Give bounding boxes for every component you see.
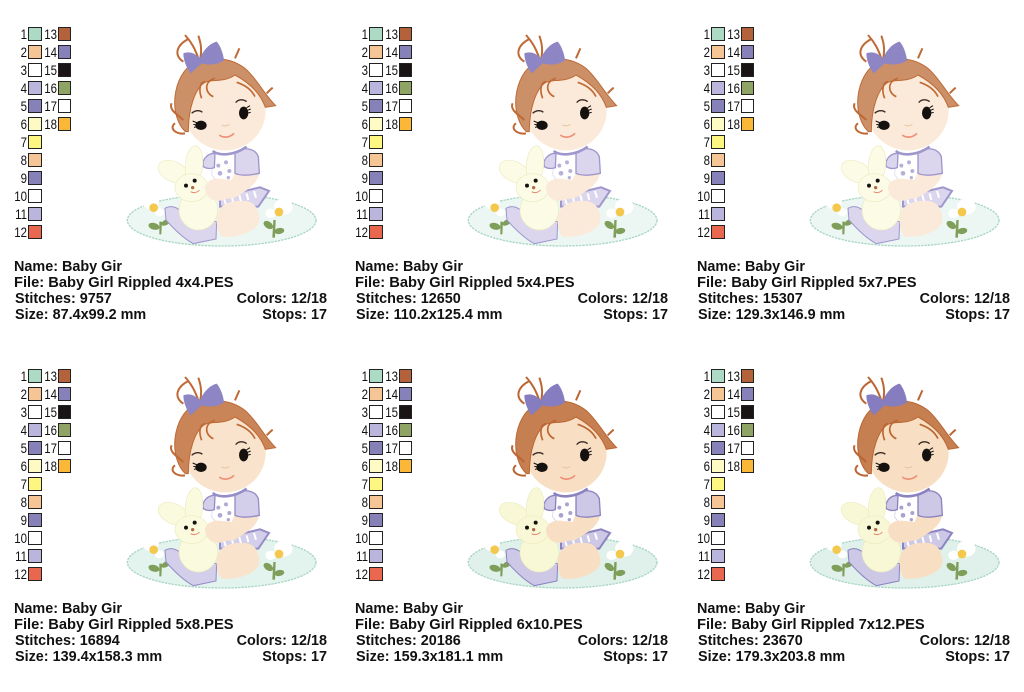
design details	[355, 259, 668, 323]
color legend: 11	[356, 206, 368, 222]
color legend: 1	[21, 368, 27, 384]
color legend: 11	[698, 548, 710, 564]
panel: design 5x4	[355, 26, 668, 323]
color legend: 16	[44, 80, 57, 96]
color legend: 17	[727, 440, 740, 456]
color legend: 3	[21, 62, 27, 78]
illustration: baby girl with bunny	[126, 376, 317, 589]
color legend: 10	[14, 188, 27, 204]
color legend: 9	[362, 512, 368, 528]
color legend: 6	[362, 116, 368, 132]
design details: Name: Baby Gir	[355, 259, 463, 275]
color legend	[14, 368, 71, 582]
design details: Stops: 17	[945, 649, 1010, 665]
design details: File: Baby Girl Rippled 4x4.PES	[14, 275, 234, 291]
design details	[697, 259, 1010, 323]
color legend: 16	[727, 80, 740, 96]
color legend	[697, 26, 754, 240]
design details: Name: Baby Gir	[355, 601, 463, 617]
color legend: 15	[44, 62, 57, 78]
color legend: 16	[385, 422, 398, 438]
design details: Stitches: 23670	[698, 633, 803, 649]
color legend: 4	[21, 422, 27, 438]
design details: Size: 159.3x181.1 mm	[356, 649, 503, 665]
color legend: 7	[362, 134, 368, 150]
color legend: 8	[362, 494, 368, 510]
color legend: 13	[44, 26, 57, 42]
color legend: 2	[704, 386, 710, 402]
color legend: 15	[385, 62, 398, 78]
panel: design 5x7	[697, 26, 1010, 323]
color legend: 15	[44, 404, 57, 420]
color legend: 10	[697, 530, 710, 546]
color legend: 2	[704, 44, 710, 60]
color legend: 4	[362, 80, 368, 96]
color legend	[355, 368, 412, 582]
color legend: 4	[704, 80, 710, 96]
panel: design 6x10	[355, 368, 668, 665]
illustration: baby girl with bunny	[810, 34, 1000, 247]
color legend: 2	[21, 386, 27, 402]
color legend: 12	[14, 224, 27, 240]
design details: File: Baby Girl Rippled 5x8.PES	[14, 617, 234, 633]
color legend: 8	[704, 494, 710, 510]
design details: Colors: 12/18	[237, 291, 327, 307]
design details: Size: 179.3x203.8 mm	[698, 649, 845, 665]
color legend: 3	[21, 404, 27, 420]
design details: Name: Baby Gir	[697, 259, 805, 275]
design details: Stops: 17	[945, 307, 1010, 323]
color legend: 9	[362, 170, 368, 186]
color legend: 10	[14, 530, 27, 546]
design details	[14, 601, 327, 665]
design details	[14, 259, 327, 323]
color legend: 14	[44, 386, 57, 402]
color legend: 7	[704, 134, 710, 150]
color legend: 18	[385, 116, 398, 132]
color legend	[697, 368, 754, 582]
color legend: 11	[15, 206, 27, 222]
color legend: 17	[44, 98, 57, 114]
color legend: 6	[704, 116, 710, 132]
design details: File: Baby Girl Rippled 7x12.PES	[697, 617, 925, 633]
color legend: 1	[21, 26, 27, 42]
design details: Name: Baby Gir	[14, 259, 122, 275]
color legend: 13	[385, 26, 398, 42]
design details	[355, 601, 668, 665]
color legend: 8	[362, 152, 368, 168]
color legend: 10	[697, 188, 710, 204]
color legend: 2	[21, 44, 27, 60]
color legend: 13	[727, 368, 740, 384]
color legend: 13	[385, 368, 398, 384]
design details: Size: 129.3x146.9 mm	[698, 307, 845, 323]
color legend: 5	[704, 440, 710, 456]
color legend: 14	[385, 44, 398, 60]
panel: design 7x12	[697, 368, 1010, 665]
color legend: 5	[704, 98, 710, 114]
color legend: 5	[362, 440, 368, 456]
color legend: 4	[704, 422, 710, 438]
design details: Stops: 17	[603, 307, 668, 323]
color legend: 18	[727, 116, 740, 132]
color legend: 14	[727, 386, 740, 402]
color legend: 12	[14, 566, 27, 582]
illustration: baby girl with bunny	[468, 376, 658, 589]
design details: Stitches: 15307	[698, 291, 803, 307]
design details: Size: 139.4x158.3 mm	[15, 649, 162, 665]
color legend: 4	[21, 80, 27, 96]
color legend: 3	[362, 62, 368, 78]
color legend: 3	[362, 404, 368, 420]
design details: Stitches: 12650	[356, 291, 461, 307]
color legend: 15	[385, 404, 398, 420]
panel: design 4x4	[14, 26, 327, 323]
design details: Stops: 17	[262, 649, 327, 665]
design details: File: Baby Girl Rippled 6x10.PES	[355, 617, 583, 633]
color legend: 18	[44, 116, 57, 132]
color legend: 15	[727, 62, 740, 78]
design details: Colors: 12/18	[578, 633, 668, 649]
color legend: 3	[704, 404, 710, 420]
design details: Stops: 17	[603, 649, 668, 665]
color legend: 5	[362, 98, 368, 114]
design details: Colors: 12/18	[920, 291, 1010, 307]
color legend: 7	[704, 476, 710, 492]
design details: Name: Baby Gir	[697, 601, 805, 617]
design details: File: Baby Girl Rippled 5x7.PES	[697, 275, 917, 291]
color legend: 5	[21, 440, 27, 456]
color legend: 17	[44, 440, 57, 456]
design details: Stops: 17	[262, 307, 327, 323]
color legend: 15	[727, 404, 740, 420]
color legend: 17	[385, 440, 398, 456]
color legend: 2	[362, 44, 368, 60]
color legend: 7	[21, 476, 27, 492]
color legend: 16	[44, 422, 57, 438]
design details: Name: Baby Gir	[14, 601, 122, 617]
color legend: 8	[21, 152, 27, 168]
color legend: 5	[21, 98, 27, 114]
color legend: 18	[44, 458, 57, 474]
color legend: 6	[21, 116, 27, 132]
color legend: 17	[727, 98, 740, 114]
color legend: 14	[44, 44, 57, 60]
design details: Colors: 12/18	[578, 291, 668, 307]
color legend: 8	[21, 494, 27, 510]
color legend: 8	[704, 152, 710, 168]
color legend: 12	[697, 566, 710, 582]
design details: Stitches: 9757	[15, 291, 112, 307]
color legend: 1	[704, 368, 710, 384]
design details: Stitches: 16894	[15, 633, 120, 649]
color legend: 13	[727, 26, 740, 42]
color legend	[355, 26, 412, 240]
color legend: 13	[44, 368, 57, 384]
color legend: 3	[704, 62, 710, 78]
color legend: 9	[21, 512, 27, 528]
design details: File: Baby Girl Rippled 5x4.PES	[355, 275, 575, 291]
color legend: 11	[15, 548, 27, 564]
color legend: 16	[727, 422, 740, 438]
color legend: 6	[21, 458, 27, 474]
color legend: 1	[362, 26, 368, 42]
design details: Size: 87.4x99.2 mm	[15, 307, 146, 323]
color legend: 18	[385, 458, 398, 474]
color legend: 1	[704, 26, 710, 42]
design details: Colors: 12/18	[237, 633, 327, 649]
color legend: 18	[727, 458, 740, 474]
color legend: 9	[704, 170, 710, 186]
color legend: 7	[21, 134, 27, 150]
color legend: 14	[385, 386, 398, 402]
color legend: 12	[355, 566, 368, 582]
panel: design 5x8	[14, 368, 327, 665]
illustration: baby girl with bunny	[810, 376, 1000, 589]
design details: Stitches: 20186	[356, 633, 461, 649]
color legend: 9	[704, 512, 710, 528]
color legend: 17	[385, 98, 398, 114]
design details: Colors: 12/18	[920, 633, 1010, 649]
color legend: 2	[362, 386, 368, 402]
color legend: 14	[727, 44, 740, 60]
color legend: 4	[362, 422, 368, 438]
color legend: 7	[362, 476, 368, 492]
design details: Size: 110.2x125.4 mm	[356, 307, 502, 323]
color legend: 6	[362, 458, 368, 474]
color legend: 12	[355, 224, 368, 240]
color legend: 9	[21, 170, 27, 186]
color legend: 10	[355, 530, 368, 546]
design details	[697, 601, 1010, 665]
color legend: 11	[356, 548, 368, 564]
color legend: 1	[362, 368, 368, 384]
color legend: 11	[698, 206, 710, 222]
color legend	[14, 26, 71, 240]
color legend: 10	[355, 188, 368, 204]
color legend: 6	[704, 458, 710, 474]
illustration: baby girl with bunny	[468, 34, 658, 247]
color legend: 12	[697, 224, 710, 240]
color legend: 16	[385, 80, 398, 96]
illustration: baby girl with bunny	[126, 34, 317, 247]
